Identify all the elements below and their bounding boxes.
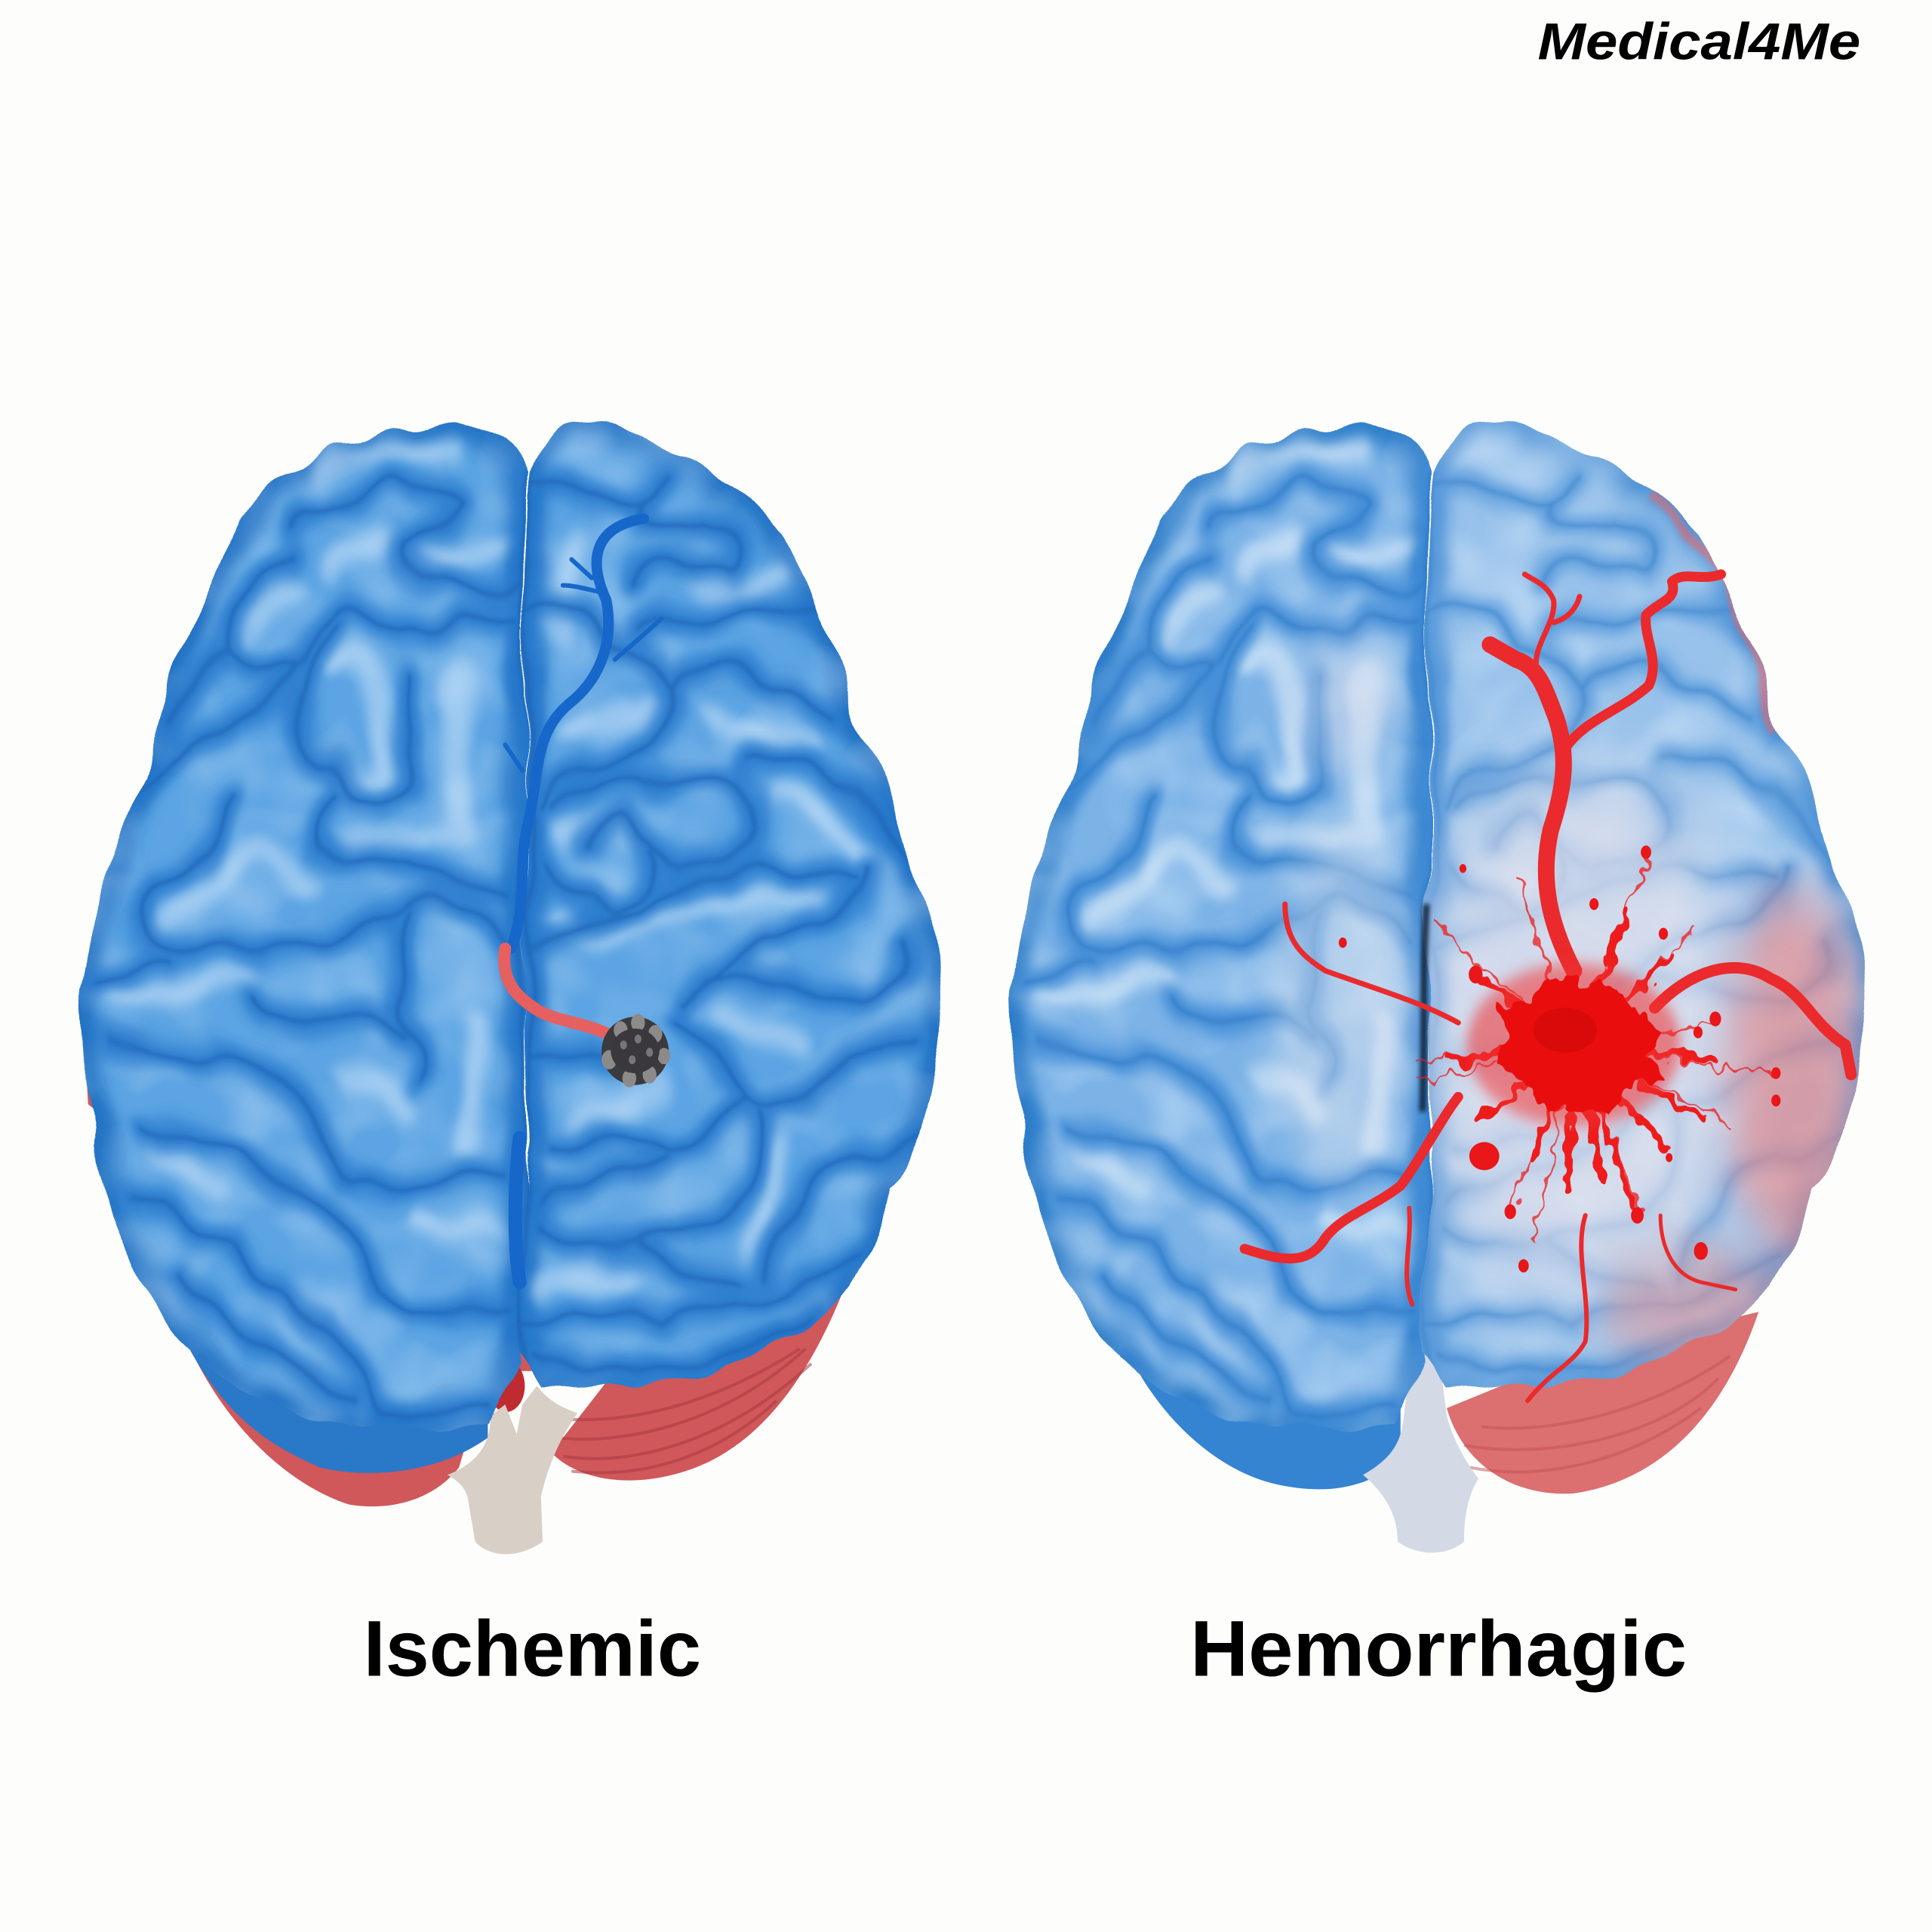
cerebellum, right red lobe [1447,1312,1758,1494]
hemorrhage core [1467,964,1681,1127]
brain: ischemic stroke [78,421,941,1555]
blue artery [505,518,661,1282]
right hemisphere [1419,421,1865,1388]
brainstem [1363,1327,1478,1552]
label: Hemorrhagic: Hemorrhagic [1190,1604,1687,1693]
blood clot [601,1014,670,1088]
cerebellum ridges [1464,1356,1730,1472]
cerebellum folds, left blue portion [182,1334,488,1473]
brainstem [448,1386,577,1554]
brainstem dark red gap [488,1360,525,1412]
medial fissure shadow [1423,904,1426,1112]
cerebellum, red lobes [170,1260,854,1506]
red artery network [1244,574,1851,1401]
pale tissue around bleed [1414,771,1753,1304]
blood spatter [1339,845,1780,1272]
red occluded vessel segment [504,949,612,1036]
red patch at left edge [85,1045,130,1119]
hemorrhage burst rays [1412,852,1770,1245]
pale ischemic tissue, left [1274,823,1416,1178]
brand label: Medical4Me: Medical4Me [1538,12,1860,70]
right hemisphere [516,421,941,1388]
brain: hemorrhagic stroke [1008,421,1865,1553]
label: Ischemic: Ischemic [364,1604,701,1693]
left hemisphere [78,422,530,1432]
left hemisphere [1008,422,1434,1432]
pink flush at outer edge [1729,889,1863,1260]
cerebellum, left blue lobe [1118,1327,1401,1489]
cerebellum ridges, right side [557,1349,811,1472]
